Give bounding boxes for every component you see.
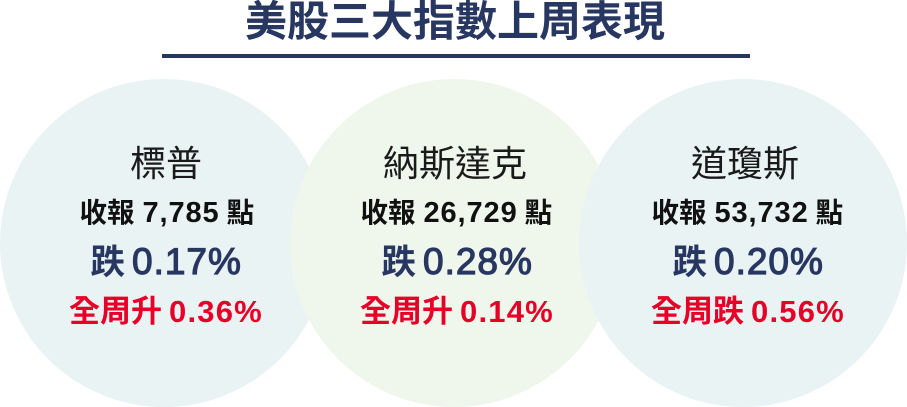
S&P close: 收報 7,785 點 [80,197,254,229]
S&P daily change: 跌0.17% [90,241,242,282]
Nasdaq name: 納斯達克 [383,143,527,184]
Nasdaq close: 收報 26,729 點 [360,197,552,229]
Dow daily change: 跌0.20% [672,241,824,282]
panel: Nasdaq circle [290,79,618,407]
title underline [162,54,750,58]
Dow close: 收報 53,732 點 [652,197,843,229]
Nasdaq daily change: 跌0.28% [382,241,533,282]
panel: S&P circle [0,79,328,407]
panel: Dow circle [579,79,907,407]
Nasdaq weekly change: 全周升0.14% [360,294,554,329]
S&P weekly change: 全周升0.36% [69,294,263,329]
Dow weekly change: 全周跌0.56% [651,294,845,329]
S&P name: 標普 [130,143,202,184]
Dow name: 道瓊斯 [691,143,799,184]
